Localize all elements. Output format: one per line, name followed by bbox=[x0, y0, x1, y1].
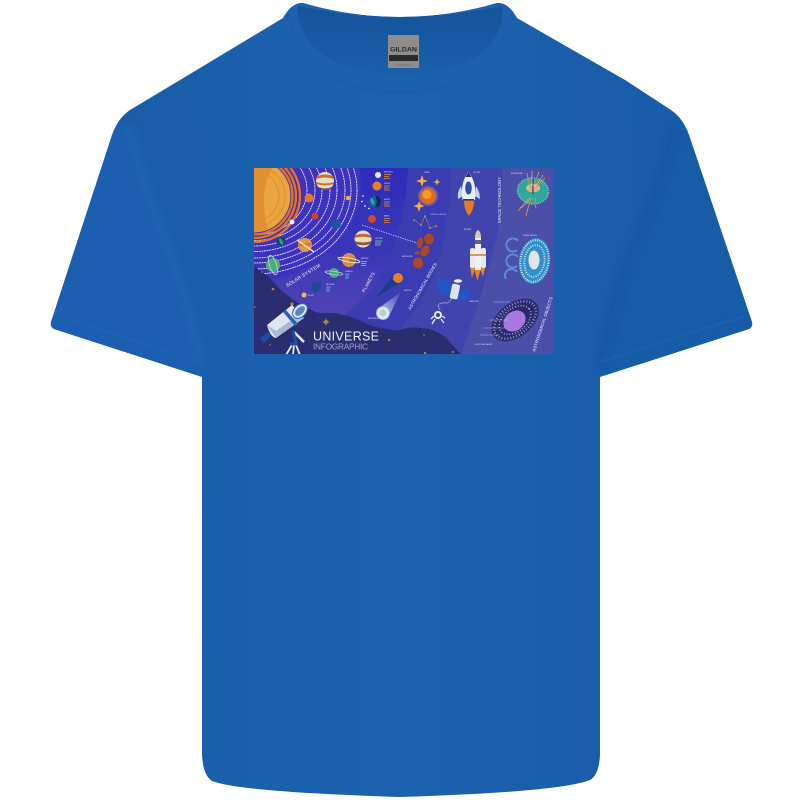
icon: astronaut bbox=[431, 298, 452, 324]
neck tag: ULTRA COTTON bbox=[396, 64, 412, 67]
asteroids: ASTEROIDS bbox=[402, 255, 413, 258]
solar system planets bbox=[266, 172, 350, 276]
icon: satellite: SATELLITE bbox=[469, 300, 479, 303]
band: astronomical bodies bbox=[344, 168, 451, 330]
title: INFOGRAPHIC bbox=[313, 342, 368, 352]
planet column bbox=[302, 172, 382, 298]
icon: rocket two bbox=[464, 229, 486, 281]
band: space technology bbox=[400, 168, 503, 354]
uranus bbox=[325, 268, 343, 278]
heading: solar system: SOLAR SYSTEM bbox=[285, 263, 322, 289]
collar ribbing bbox=[283, 3, 517, 97]
gauges bbox=[505, 238, 518, 279]
saturn bbox=[338, 253, 360, 267]
icon: meteor: METEOR bbox=[404, 290, 412, 292]
icon: rocket two: ROCKET bbox=[464, 229, 472, 231]
panel background: astronomical objects band bbox=[461, 168, 553, 354]
planet labels bbox=[308, 172, 394, 297]
constellation: CONSTELLATIONS bbox=[430, 213, 447, 216]
icon: spiral galaxy: SPIRAL GALAXY bbox=[523, 234, 538, 237]
planet labels: PLUTO bbox=[308, 295, 315, 297]
planet labels: MARS bbox=[384, 214, 390, 218]
planet labels: SATURN bbox=[361, 257, 369, 260]
sleeve shading bbox=[40, 125, 760, 375]
icon: meteoroid: METEOROID bbox=[368, 318, 380, 320]
planet labels: NEPTUNE bbox=[326, 284, 335, 286]
striped giant bbox=[316, 172, 334, 190]
title bbox=[313, 330, 379, 352]
constellation bbox=[413, 213, 447, 229]
heading: space technology: SPACE TECHNOLOGY bbox=[497, 177, 502, 223]
planet labels: VENUS bbox=[384, 183, 391, 185]
ringed green planet bbox=[266, 254, 280, 276]
icon: meteoroid bbox=[368, 292, 401, 320]
icon: spiral galaxy bbox=[518, 234, 550, 284]
hill stars bbox=[254, 271, 454, 354]
band: planets bbox=[272, 168, 408, 315]
heading: planets: PLANETS bbox=[361, 271, 376, 293]
icon: meteor bbox=[375, 273, 412, 298]
title: UNIVERSE bbox=[313, 330, 379, 344]
icon: elliptical galaxy bbox=[475, 298, 539, 345]
stars and star body: STARS bbox=[424, 171, 431, 174]
planet labels: JUPITER bbox=[375, 238, 383, 240]
heading: astronomical bodies: ASTRONOMICAL BODIES bbox=[407, 262, 438, 311]
icon: elliptical galaxy: ELLIPTICAL GALAXY bbox=[475, 343, 493, 346]
neck tag: GILDAN bbox=[390, 46, 417, 54]
sun bbox=[254, 168, 302, 244]
earth with moons bbox=[361, 195, 381, 209]
planet labels: URANUS bbox=[345, 270, 353, 273]
neck tag bbox=[388, 35, 419, 68]
icon: supernova: SUPERNOVA bbox=[511, 172, 523, 175]
jupiter bbox=[354, 230, 372, 248]
planet labels: MERCURY bbox=[384, 172, 394, 174]
dark hill bbox=[254, 267, 461, 354]
planet labels: EARTH bbox=[384, 198, 391, 201]
icon: rocket one bbox=[458, 172, 481, 216]
orbits bbox=[254, 168, 358, 274]
printed infographic panel bbox=[254, 168, 553, 354]
inner neck bbox=[297, 6, 503, 74]
dashed leader line bbox=[362, 225, 417, 243]
icon: rocket one: ROCKET bbox=[473, 172, 481, 174]
stars and star body bbox=[414, 171, 440, 212]
icon: supernova bbox=[511, 171, 550, 216]
icon: satellite bbox=[437, 277, 479, 303]
asteroids bbox=[402, 234, 434, 268]
heading: astronomical objects: ASTRONOMICAL OBJECTS bbox=[531, 296, 554, 352]
icon: telescope bbox=[260, 301, 310, 355]
ringed saturn bbox=[297, 238, 314, 252]
solar system disc bbox=[255, 168, 361, 279]
